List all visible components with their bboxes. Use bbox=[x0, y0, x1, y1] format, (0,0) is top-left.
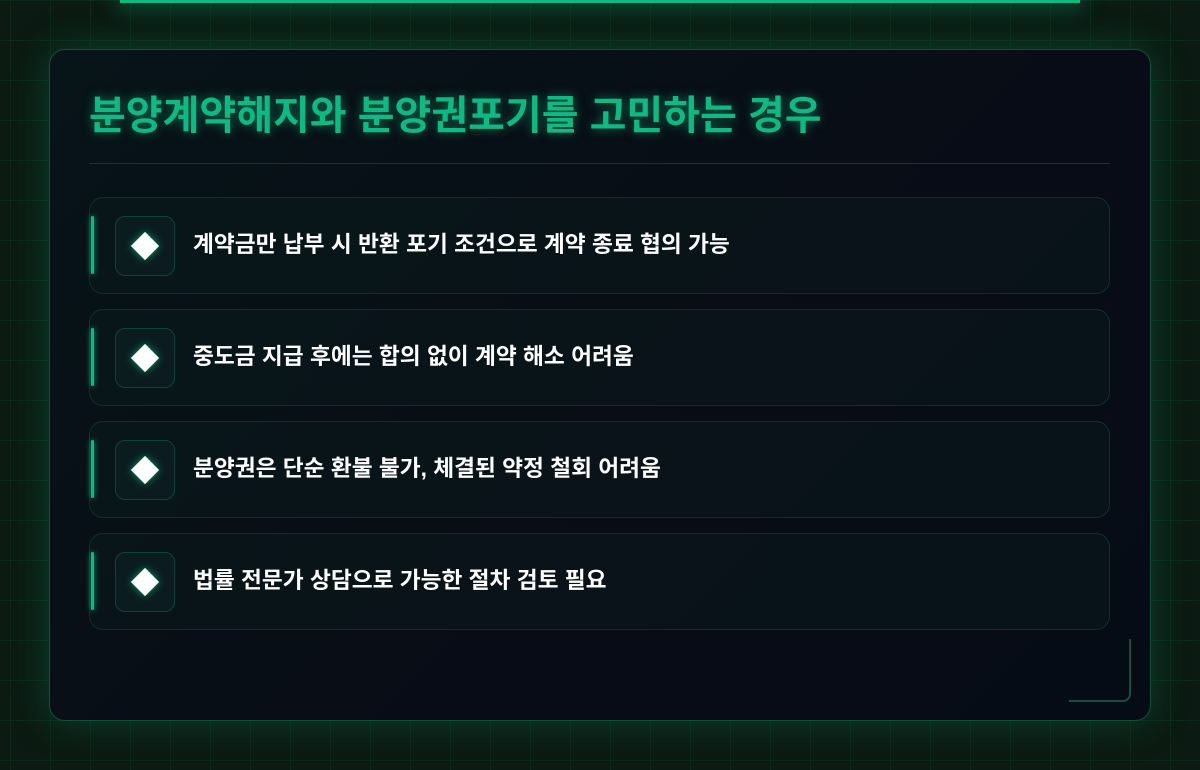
icon: diamond bbox=[115, 440, 175, 500]
item 3 bbox=[89, 421, 1110, 518]
item 2 bbox=[89, 309, 1110, 406]
icon: diamond bbox=[115, 552, 175, 612]
text 3: 분양권은 단순 환불 불가, 체결된 약정 철회 어려움 bbox=[193, 455, 661, 481]
icon: diamond bbox=[115, 216, 175, 276]
icon: diamond bbox=[115, 328, 175, 388]
text 4: 법률 전문가 상담으로 가능한 절차 검토 필요 bbox=[193, 567, 607, 593]
text 2: 중도금 지급 후에는 합의 없이 계약 해소 어려움 bbox=[193, 343, 634, 369]
text 1: 계약금만 납부 시 반환 포기 조건으로 계약 종료 협의 가능 bbox=[193, 231, 730, 257]
item 4 bbox=[89, 533, 1110, 630]
title: 분양계약해지와 분양권포기를 고민하는 경우 bbox=[89, 94, 822, 138]
item 1 bbox=[89, 197, 1110, 294]
